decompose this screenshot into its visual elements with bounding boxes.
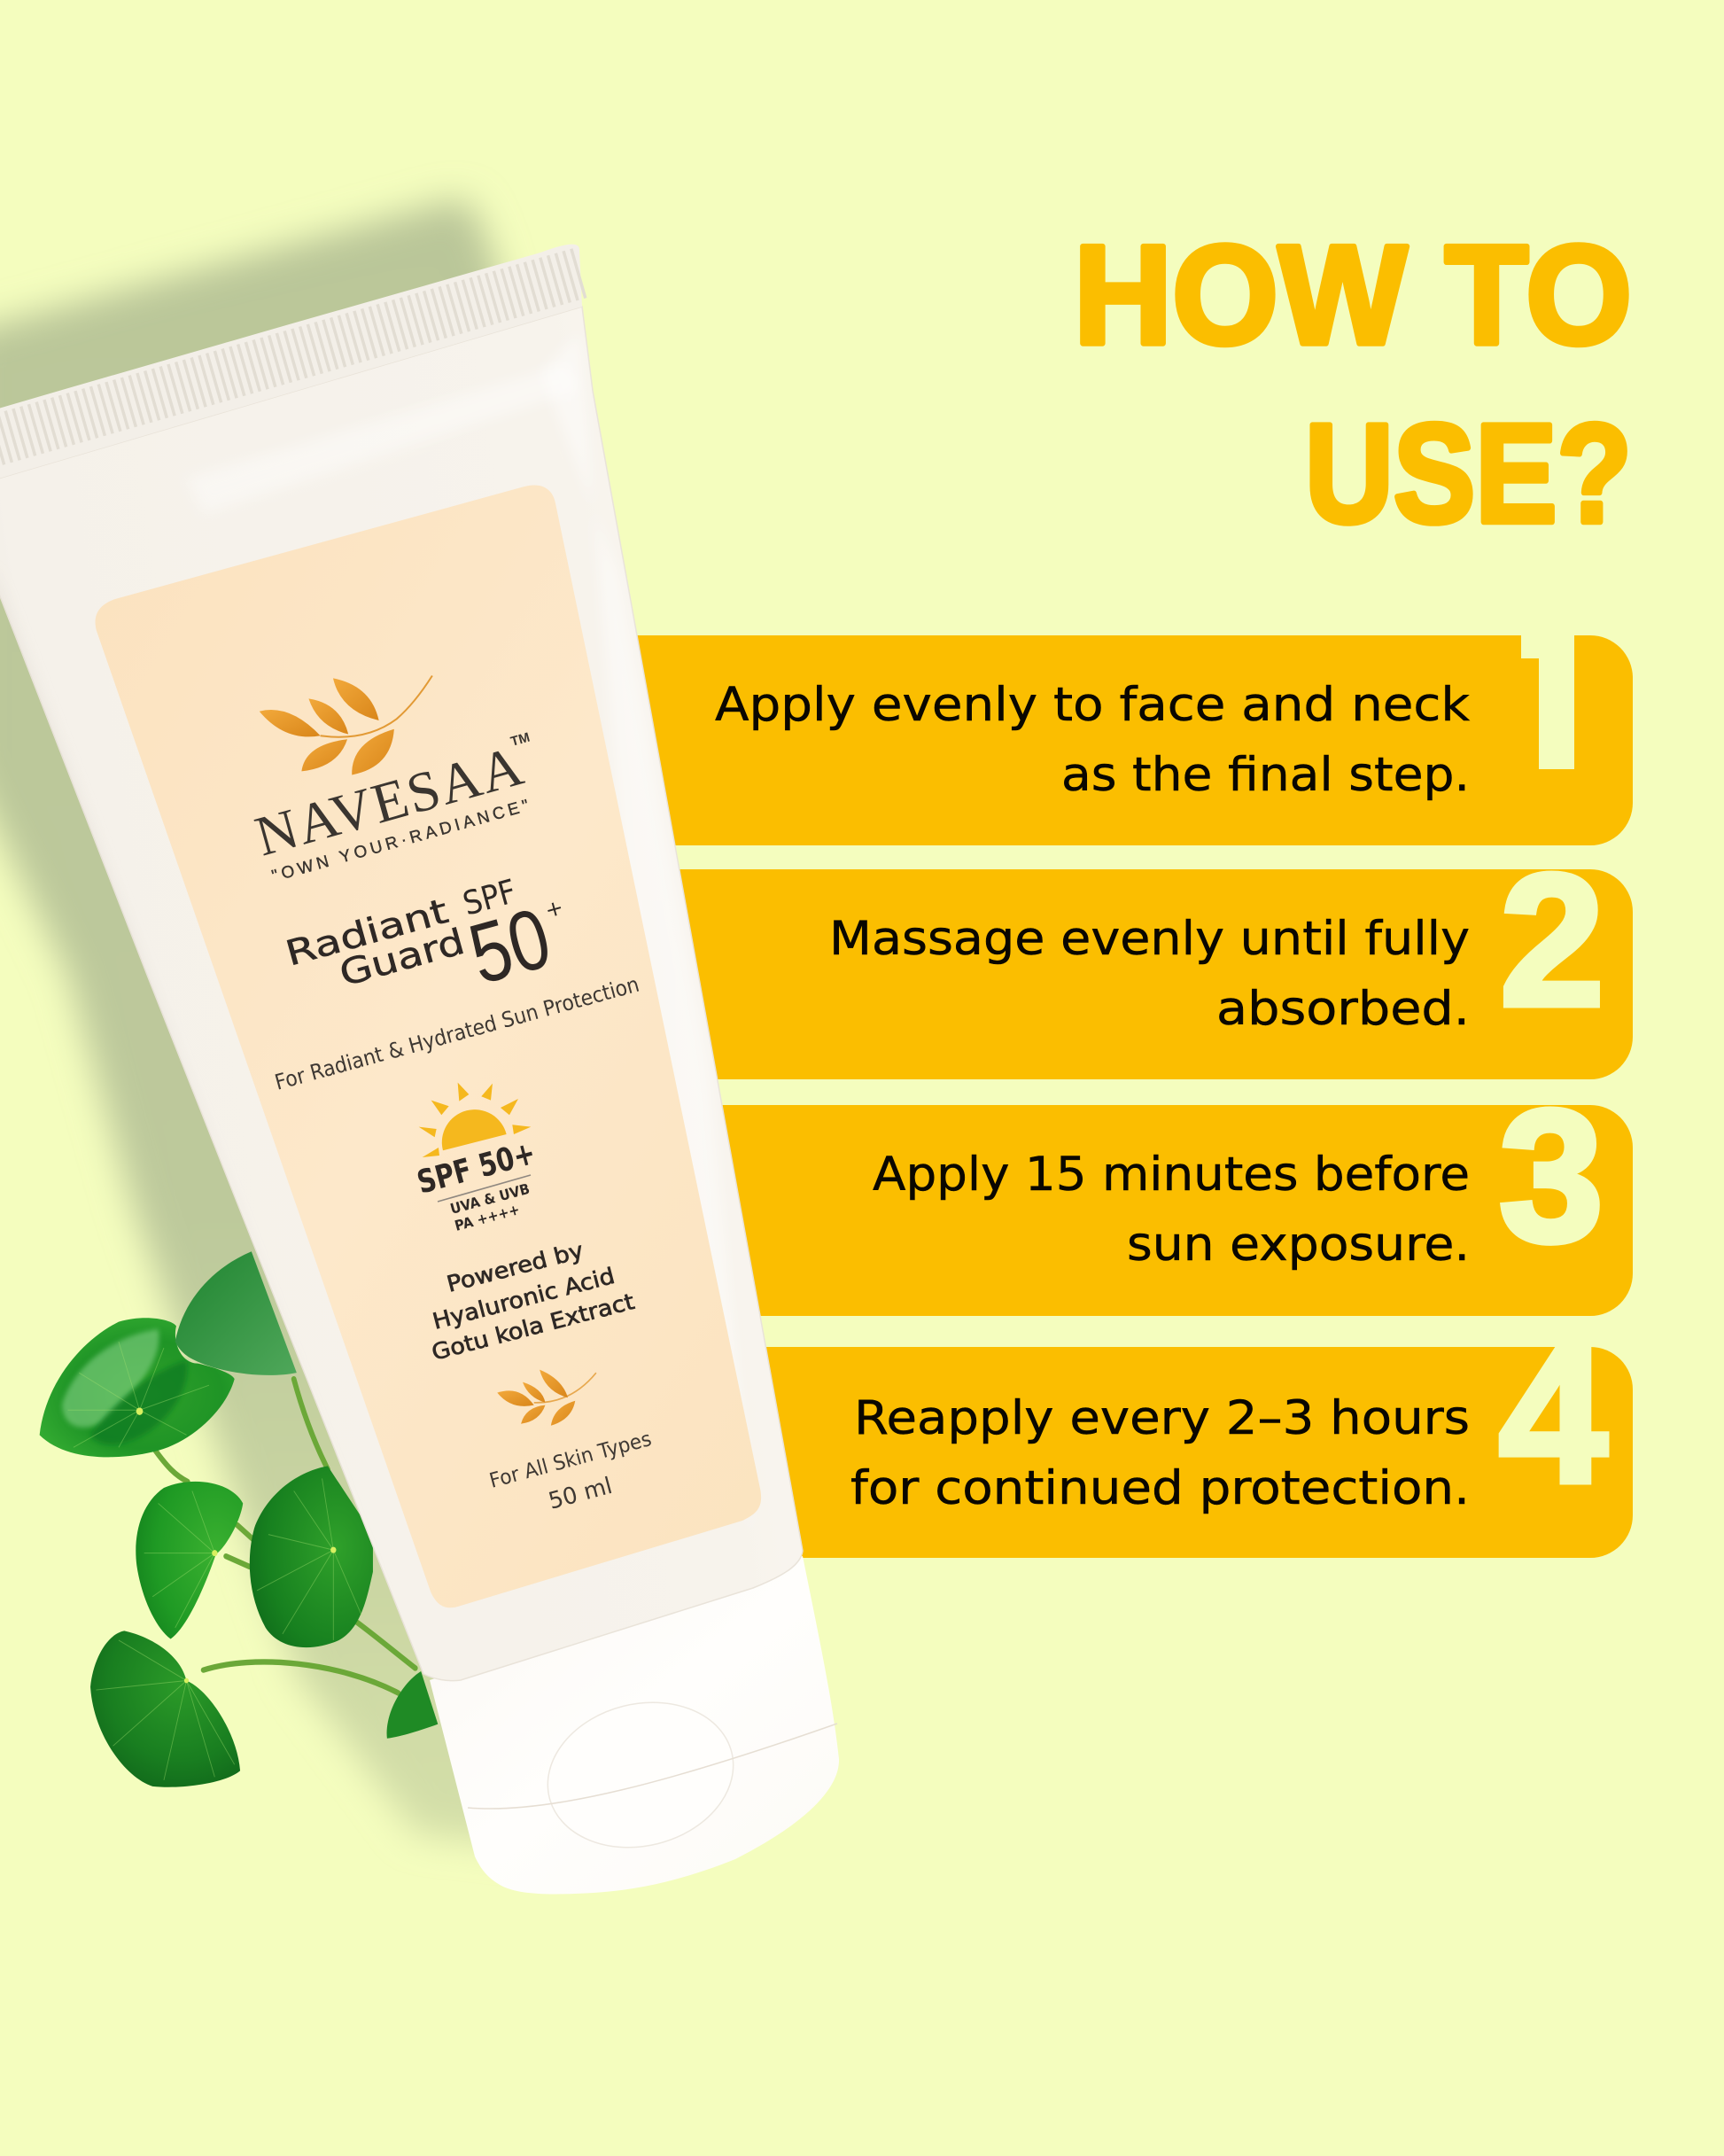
ingredients text bbox=[429, 1237, 637, 1366]
product tube bbox=[0, 245, 839, 1894]
product name: Guard bbox=[335, 922, 469, 995]
tube body bbox=[0, 307, 803, 1681]
brand tagline: "OWN YOUR·RADIANCE" bbox=[270, 797, 531, 886]
spf badge text bbox=[414, 1135, 540, 1234]
step card 2 bbox=[567, 835, 1633, 1079]
tube crimp bbox=[0, 245, 582, 479]
step card 3 bbox=[567, 1070, 1633, 1316]
brand name: NAVESAA bbox=[249, 734, 529, 868]
brand logo sprig bbox=[260, 676, 432, 774]
step 4 text: for continued protection. bbox=[850, 1461, 1470, 1515]
heading: how to use: USE? bbox=[1305, 394, 1632, 552]
step 2 text: absorbed. bbox=[1216, 982, 1470, 1036]
product name: 50 bbox=[460, 891, 560, 1002]
step card 4 bbox=[567, 1305, 1633, 1558]
gotu kola leaves bbox=[40, 1251, 438, 1787]
trademark: TM bbox=[509, 730, 532, 750]
product tagline: For Radiant & Hydrated Sun Protection bbox=[272, 972, 642, 1095]
step card 1 bbox=[567, 634, 1633, 845]
step number 1 bbox=[1521, 634, 1574, 769]
infographic canvas bbox=[0, 185, 1633, 1895]
icon: sun bbox=[419, 1083, 531, 1157]
tube highlight bbox=[132, 339, 687, 1132]
step number 3: 3 bbox=[1499, 1070, 1604, 1280]
spf badge text: UVA & UVB bbox=[448, 1180, 532, 1218]
product name bbox=[282, 872, 566, 1002]
step 1 text: as the final step. bbox=[1061, 748, 1470, 802]
skin type and volume text bbox=[487, 1428, 654, 1515]
tube cast shadow bbox=[0, 199, 673, 1852]
step 1 text: Apply evenly to face and neck bbox=[715, 678, 1470, 732]
ingredients text: Hyaluronic Acid bbox=[430, 1263, 617, 1335]
heading: how to use: HOW TO bbox=[1074, 216, 1632, 374]
product name: + bbox=[542, 894, 566, 923]
step 2 text: Massage evenly until fully bbox=[829, 912, 1470, 966]
step 3 text bbox=[873, 1148, 1470, 1272]
step 1 text bbox=[715, 678, 1470, 802]
tube cap bbox=[430, 1556, 839, 1894]
small sprig bbox=[497, 1370, 596, 1426]
spf badge text: PA ++++ bbox=[453, 1201, 521, 1234]
step number 2: 2 bbox=[1500, 835, 1604, 1045]
product name: SPF bbox=[459, 872, 520, 923]
product label bbox=[96, 486, 761, 1607]
step 4 text: Reapply every 2–3 hours bbox=[854, 1391, 1470, 1445]
ingredients text: Gotu kola Extract bbox=[429, 1288, 637, 1366]
spf badge text: SPF 50+ bbox=[414, 1135, 540, 1202]
product name: Radiant bbox=[282, 891, 453, 975]
step number 4: 4 bbox=[1499, 1305, 1607, 1523]
step 3 text: Apply 15 minutes before bbox=[873, 1148, 1470, 1202]
step 4 text bbox=[850, 1391, 1470, 1515]
heading: how to use bbox=[1074, 216, 1632, 552]
skin type and volume text: For All Skin Types bbox=[487, 1428, 654, 1493]
cap oval mark bbox=[532, 1684, 749, 1866]
skin type and volume text: 50 ml bbox=[546, 1473, 615, 1515]
step 2 text bbox=[829, 912, 1470, 1036]
step 3 text: sun exposure. bbox=[1127, 1218, 1470, 1272]
ingredients text: Powered by bbox=[444, 1237, 586, 1297]
